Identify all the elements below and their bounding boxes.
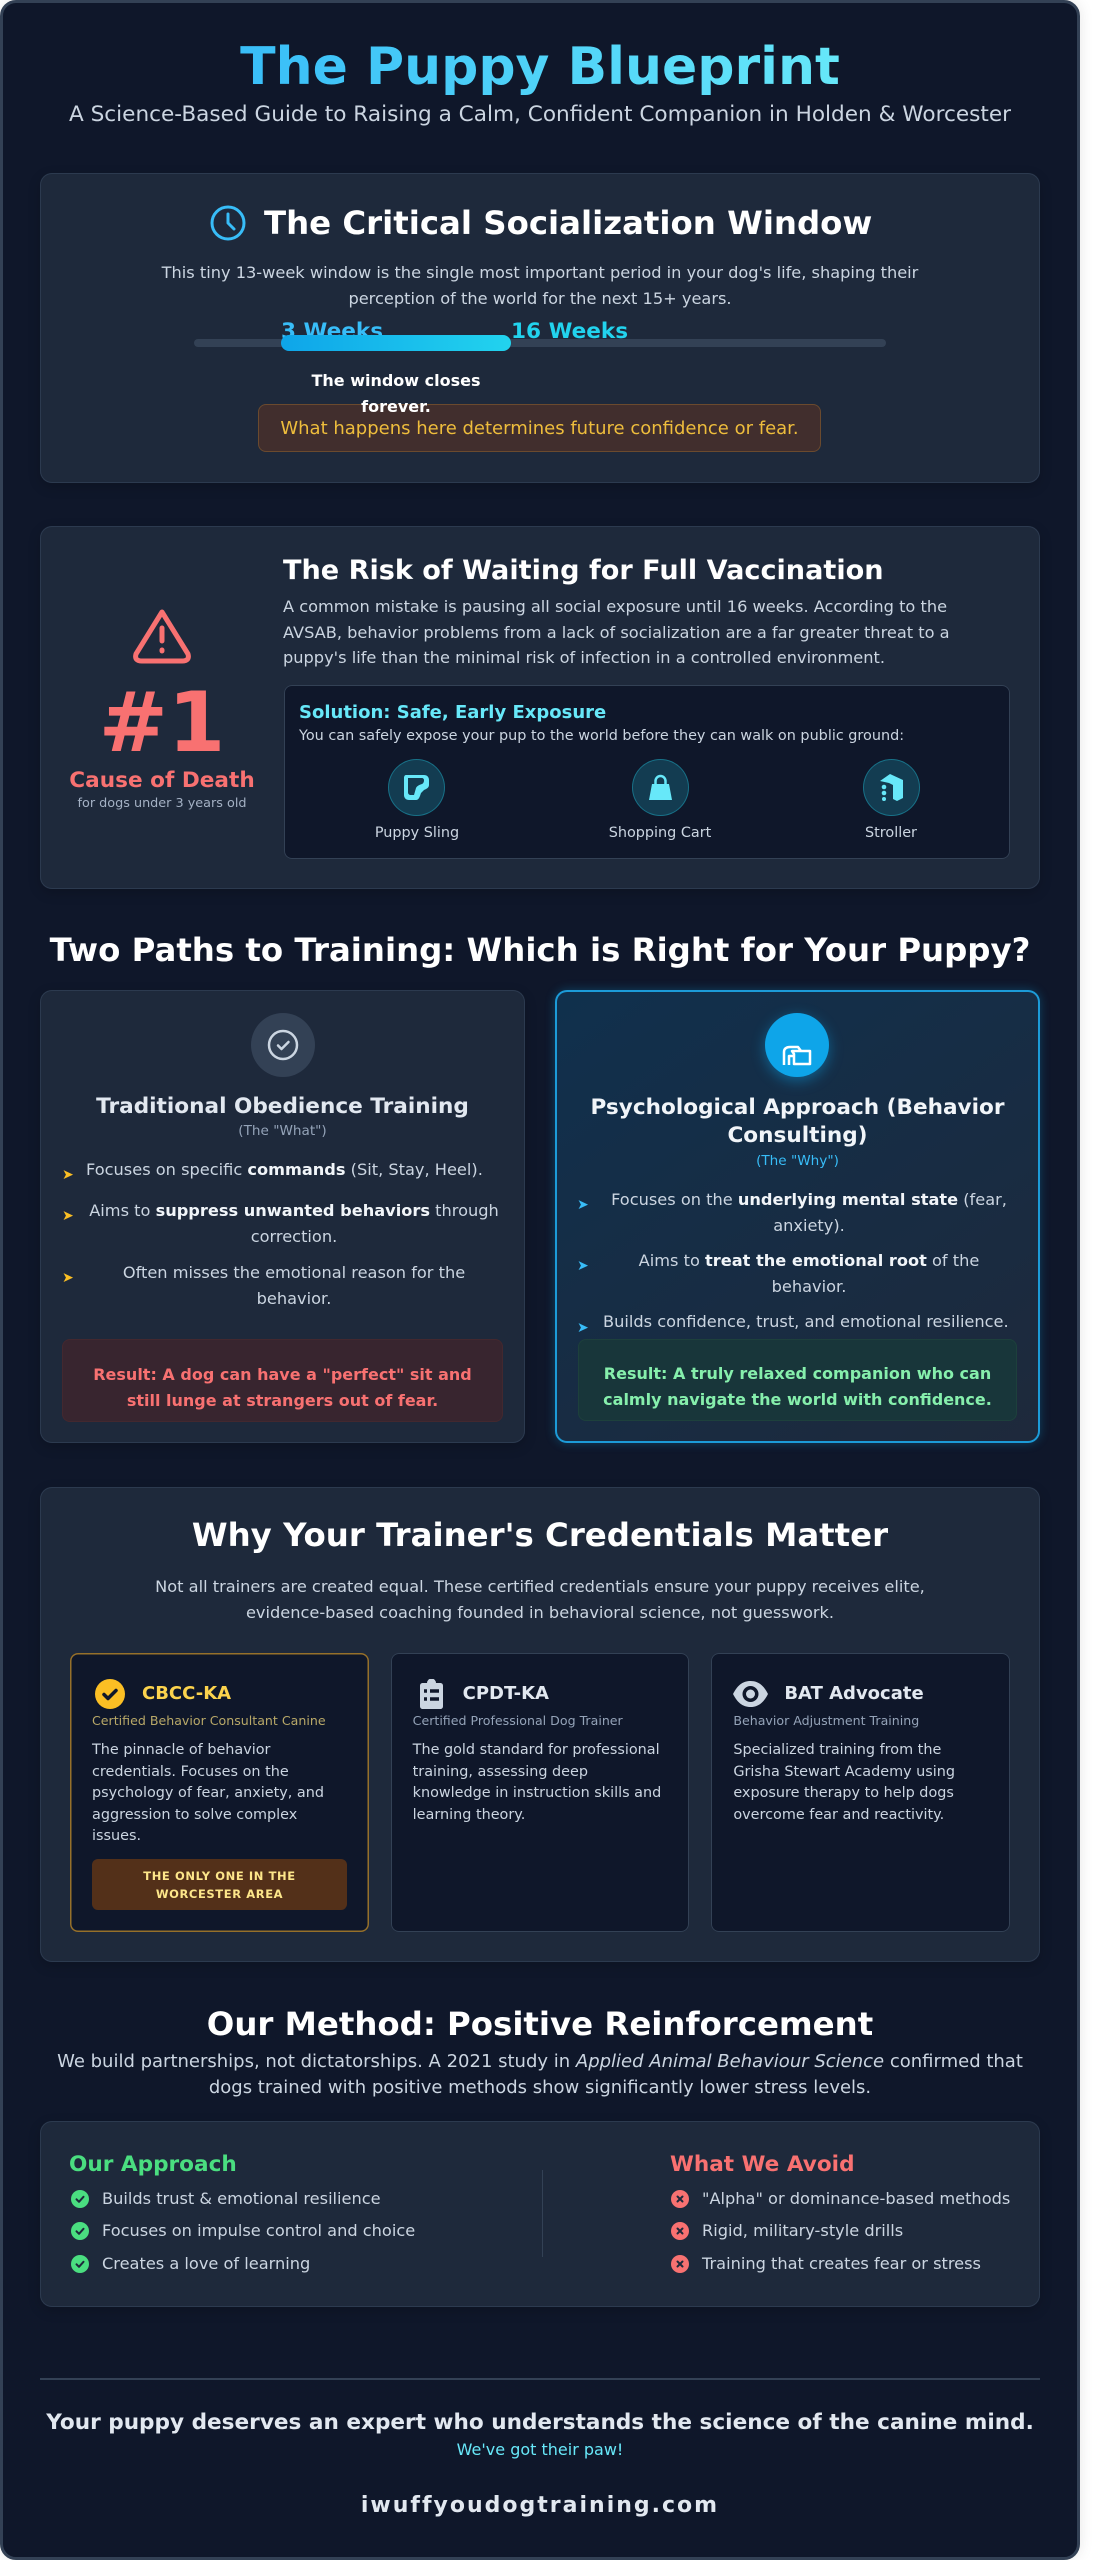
intro text: perception of the world for the next 15+ years. bbox=[348, 289, 732, 308]
bullet text: behavior. bbox=[772, 1277, 846, 1296]
panel: psychological approach bbox=[555, 990, 1040, 1443]
icon: puppy sling bbox=[388, 758, 445, 816]
card title: BAT Advocate bbox=[784, 1683, 924, 1704]
card: CPDT-KA bbox=[391, 1653, 689, 1932]
list item: Creates a love of learning bbox=[102, 2254, 310, 2273]
section heading: two paths: Two Paths to Training: Which is Right for Your Puppy? bbox=[50, 931, 1030, 969]
section intro text bbox=[57, 2051, 1023, 2098]
bullet text: correction. bbox=[251, 1227, 337, 1246]
footer tagline: Your puppy deserves an expert who understands the science of the canine mind. bbox=[46, 2410, 1034, 2435]
result box: Result: A truly relaxed companion who can bbox=[604, 1364, 991, 1383]
icon: eye bbox=[733, 1681, 768, 1707]
icon: paw consult bbox=[765, 1013, 829, 1077]
bullet text: anxiety). bbox=[773, 1216, 845, 1235]
card description: Specialized training from the bbox=[733, 1742, 941, 1758]
panel: traditional obedience bbox=[40, 990, 525, 1443]
intro text: This tiny 13-week window is the single most important period in your dog's life, shaping their bbox=[162, 263, 918, 282]
label: window closes: forever. bbox=[361, 397, 431, 416]
bullet arrow: ➤ bbox=[577, 1197, 589, 1213]
callout bbox=[258, 404, 821, 452]
intro text: evidence-based coaching founded in behavioral science, not guesswork. bbox=[246, 1603, 834, 1622]
label: Stroller bbox=[865, 825, 917, 841]
card subtitle: Certified Behavior Consultant Canine bbox=[92, 1713, 326, 1728]
result box: calmly navigate the world with confidence. bbox=[603, 1390, 992, 1409]
bullet arrow: ➤ bbox=[577, 1258, 589, 1274]
list item: "Alpha" or dominance-based methods bbox=[702, 2189, 1010, 2208]
label: window closes bbox=[311, 371, 481, 416]
card subtitle: (The "What") bbox=[238, 1123, 327, 1139]
badge bbox=[92, 1859, 347, 1910]
icon: shopping cart bbox=[632, 758, 688, 816]
card description: credentials. Focuses on the bbox=[92, 1764, 289, 1780]
body text bbox=[283, 597, 950, 667]
card description bbox=[92, 1742, 324, 1844]
bullet text bbox=[611, 1190, 1007, 1235]
footer website: iwuffyoudogtraining.com bbox=[361, 2493, 719, 2518]
card subtitle: (The "Why") bbox=[756, 1153, 839, 1169]
card description: issues. bbox=[92, 1828, 141, 1844]
bullet text: Focuses on the underlying mental state (fear, bbox=[611, 1190, 1007, 1209]
bullet text bbox=[123, 1263, 465, 1308]
card description: aggression to solve complex bbox=[92, 1807, 297, 1823]
label: window closes: The window closes bbox=[311, 371, 481, 390]
timeline track bbox=[194, 339, 886, 347]
result box: Result: A dog can have a "perfect" sit and bbox=[93, 1365, 472, 1384]
card title: Consulting) bbox=[727, 1123, 868, 1148]
body text: AVSAB, behavior problems from a lack of socialization are a far greater threat to a bbox=[283, 623, 950, 642]
solution text: You can safely expose your pup to the world before they can walk on public ground: bbox=[299, 728, 904, 744]
bullet arrow: ➤ bbox=[62, 1270, 74, 1286]
bullet text: Often misses the emotional reason for the bbox=[123, 1263, 465, 1282]
panel: approach vs avoid bbox=[40, 2121, 1040, 2307]
section intro text: We build partnerships, not dictatorships. A 2021 study in Applied Animal Behaviour Science confirmed that bbox=[57, 2051, 1023, 2072]
list item: Training that creates fear or stress bbox=[702, 2254, 981, 2273]
stat label: Cause of Death bbox=[69, 768, 255, 793]
panel: risk of waiting bbox=[40, 526, 1040, 889]
bullet arrow: ➤ bbox=[62, 1208, 74, 1224]
icon: stroller bbox=[862, 758, 920, 816]
card description bbox=[412, 1742, 661, 1823]
section heading: our method: Our Method: Positive Reinforcement bbox=[207, 2005, 873, 2043]
card title: CBCC-KA bbox=[142, 1683, 231, 1704]
bullet text bbox=[89, 1201, 499, 1246]
card description: The pinnacle of behavior bbox=[92, 1742, 270, 1758]
card description: The gold standard for professional bbox=[413, 1742, 660, 1758]
badge: THE ONLY ONE IN THE bbox=[143, 1869, 296, 1883]
card: CBCC-KA bbox=[70, 1653, 369, 1932]
panel: critical socialization window bbox=[40, 173, 1040, 483]
stat: number one cause of death bbox=[69, 610, 255, 811]
list item: Builds trust & emotional resilience bbox=[102, 2189, 381, 2208]
callout: What happens here determines future confidence or fear. bbox=[280, 418, 799, 439]
result box bbox=[578, 1339, 1017, 1421]
card description: learning theory. bbox=[413, 1807, 525, 1823]
card description: overcome fear and reactivity. bbox=[733, 1807, 944, 1823]
big number: #1 bbox=[99, 675, 225, 771]
icon: clock bbox=[210, 206, 246, 240]
icon: warning triangle bbox=[133, 610, 191, 664]
heading: The Risk of Waiting for Full Vaccination bbox=[283, 555, 884, 586]
section intro text: dogs trained with positive methods show significantly lower stress levels. bbox=[209, 2077, 871, 2098]
stat caption: for dogs under 3 years old bbox=[77, 796, 247, 811]
card title: Traditional Obedience Training bbox=[96, 1094, 469, 1119]
intro text bbox=[155, 1577, 925, 1622]
bullet text bbox=[638, 1251, 979, 1296]
list item: Focuses on impulse control and choice bbox=[102, 2221, 415, 2240]
title: The Puppy Blueprint bbox=[240, 37, 840, 97]
label: Shopping Cart bbox=[609, 825, 711, 841]
timeline window bar bbox=[281, 335, 511, 351]
bullet arrow: ➤ bbox=[577, 1320, 589, 1336]
icon: check badge bbox=[95, 1679, 125, 1709]
bullet arrow: ➤ bbox=[62, 1167, 74, 1183]
result box bbox=[62, 1339, 503, 1422]
column: what we avoid bbox=[670, 2152, 1010, 2273]
icon: clipboard bbox=[420, 1679, 443, 1709]
bullet text: behavior. bbox=[257, 1289, 331, 1308]
card title: Psychological Approach (Behavior bbox=[590, 1095, 1005, 1120]
footer note: We've got their paw! bbox=[457, 2440, 623, 2459]
subtitle: A Science-Based Guide to Raising a Calm, Confident Companion in Holden & Worcester bbox=[69, 102, 1011, 127]
card title: CPDT-KA bbox=[463, 1683, 549, 1704]
column heading: What We Avoid bbox=[670, 2152, 855, 2177]
result box: still lunge at strangers out of fear. bbox=[127, 1391, 438, 1410]
badge: WORCESTER AREA bbox=[156, 1887, 283, 1901]
card subtitle: Behavior Adjustment Training bbox=[733, 1713, 919, 1728]
intro text bbox=[162, 263, 918, 308]
label: 16 weeks: 16 Weeks bbox=[511, 319, 628, 344]
card subtitle: Certified Professional Dog Trainer bbox=[413, 1713, 623, 1728]
card description: Grisha Stewart Academy using bbox=[733, 1764, 955, 1780]
icon: check circle bbox=[251, 1013, 315, 1077]
heading: Why Your Trainer's Credentials Matter bbox=[192, 1516, 888, 1554]
card title bbox=[590, 1095, 1005, 1148]
bullet text: Aims to suppress unwanted behaviors through bbox=[89, 1201, 499, 1220]
heading: The Critical Socialization Window bbox=[264, 204, 872, 242]
card description: training, assessing deep bbox=[413, 1764, 588, 1780]
card: BAT Advocate bbox=[711, 1653, 1010, 1932]
card description: knowledge in instruction skills and bbox=[413, 1785, 661, 1801]
label: Puppy Sling bbox=[375, 825, 459, 841]
bullet text: Builds confidence, trust, and emotional resilience. bbox=[603, 1312, 1009, 1331]
intro text: Not all trainers are created equal. These certified credentials ensure your puppy receives elite, bbox=[155, 1577, 925, 1596]
label: 3 weeks: 3 Weeks bbox=[281, 319, 383, 344]
card description: exposure therapy to help dogs bbox=[733, 1785, 954, 1801]
bullet text: Aims to treat the emotional root of the bbox=[639, 1251, 979, 1270]
list item: Rigid, military-style drills bbox=[702, 2221, 903, 2240]
column heading: Our Approach bbox=[69, 2152, 237, 2177]
solution box bbox=[284, 685, 1010, 859]
card description bbox=[733, 1742, 955, 1823]
column: our approach bbox=[69, 2152, 415, 2273]
solution heading: Solution: Safe, Early Exposure bbox=[299, 702, 606, 723]
panel: credentials bbox=[40, 1487, 1040, 1962]
card description: psychology of fear, anxiety, and bbox=[92, 1785, 324, 1801]
body text: A common mistake is pausing all social exposure until 16 weeks. According to the bbox=[283, 597, 947, 616]
bullet text: Focuses on specific commands (Sit, Stay, Heel). bbox=[86, 1160, 483, 1179]
body text: puppy's life than the minimal risk of infection in a controlled environment. bbox=[283, 648, 885, 667]
